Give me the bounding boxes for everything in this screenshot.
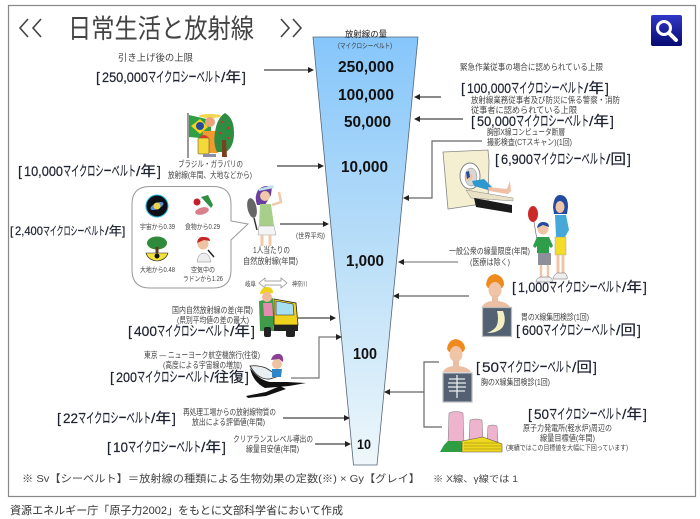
label: 250,000 dose limit: ]	[242, 69, 246, 85]
icon: man with chest X-ray	[443, 339, 472, 402]
label: 10: /年	[201, 439, 221, 455]
funnel chart: radiation dose scale: 放射線の量	[345, 29, 387, 39]
label: CT scan	[487, 127, 631, 167]
title: 日常生活と放射線	[68, 14, 254, 44]
funnel chart: radiation dose scale: 10	[357, 436, 371, 452]
label: 200: (高度による宇宙線の増加)	[163, 360, 242, 370]
label: 400: (県別平均値の差の最大)	[177, 315, 249, 325]
label: CT scan: ]	[627, 151, 631, 167]
label: 200: 200	[116, 369, 137, 385]
panel: natural radiation sources: 大地から0.48	[140, 265, 175, 274]
label: 2,400: [	[10, 224, 14, 238]
label: 200: /往復	[210, 369, 244, 385]
label: 200: ]	[245, 369, 249, 385]
label: 50,000 workers: 従事者に認められている上限	[471, 105, 577, 115]
label: 50 per year: 50	[534, 406, 549, 422]
note: sievert definition	[22, 472, 518, 485]
label: 22: マイクロシーベルト	[78, 410, 151, 426]
label: 600	[516, 312, 641, 338]
label: 50,000 workers: [	[471, 113, 475, 129]
label: 50 per scan: 50	[482, 359, 499, 375]
label: 50 per scan: マイクロシーベルト	[499, 359, 572, 375]
label: public limit: [	[512, 279, 516, 295]
label: 600: マイクロシーベルト	[543, 322, 616, 338]
label: public limit: ]	[643, 279, 647, 295]
label: 50 per year	[506, 406, 647, 452]
label: 400: 国内自然放射線の差(年間)	[172, 305, 253, 315]
label: 600: 600	[522, 322, 543, 338]
label: 200	[110, 350, 260, 385]
funnel chart: radiation dose scale: (マイクロシーベルト)	[338, 42, 392, 50]
label: 50 per year: 原子力発電所(軽水炉)周辺の	[523, 423, 612, 433]
panel: natural radiation sources: 食物から0.29	[185, 222, 220, 231]
label: 10: ]	[222, 439, 226, 455]
label: 100,000 emergency: ]	[605, 80, 609, 96]
panel: natural radiation sources: ラドンから1.26	[183, 275, 223, 283]
label: 100,000 emergency	[460, 62, 609, 96]
label: world average natural radiation	[243, 231, 325, 266]
arrow: 10	[315, 441, 351, 447]
label: 10,000 Brazil: マイクロシーベルト	[63, 163, 136, 179]
label: 2,400: マイクロシーベルト	[43, 224, 105, 238]
label: public limit: マイクロシーベルト	[549, 279, 622, 295]
panel: natural radiation sources: 宇宙から0.39	[140, 223, 175, 231]
label: 10,000 Brazil: 放射線(年間、大地などから)	[168, 170, 252, 180]
arrow: 50,000	[414, 116, 463, 122]
icon: Gifu Kanagawa comparison	[245, 278, 307, 288]
icon: CT scanner	[443, 150, 513, 213]
icon: tennis player	[246, 185, 281, 246]
label: 2,400: 2,400	[15, 224, 43, 238]
icon: mother, child and balloon	[528, 195, 569, 282]
label: 400	[128, 305, 255, 339]
label: CT scan: /回	[606, 151, 626, 167]
label: 10: クリアランスレベル導出の	[233, 434, 313, 444]
arrow: 2,400	[280, 221, 329, 227]
label: 22: ]	[172, 410, 176, 426]
funnel chart: radiation dose scale: 100,000	[338, 87, 394, 104]
label: 200: [	[110, 369, 114, 385]
label: 100,000 emergency: /年	[584, 80, 604, 96]
icon: nuclear power plant	[440, 412, 502, 452]
label: 10: [	[107, 439, 111, 455]
funnel chart: radiation dose scale: 1,000	[346, 253, 384, 270]
icon: search button	[651, 15, 682, 46]
label: 50 per year: /年	[622, 406, 642, 422]
label: 22	[57, 407, 276, 427]
arrow: 400	[298, 315, 336, 321]
label: 50 per year: 線量目標値(年間)	[540, 433, 595, 443]
label: 22: 22	[63, 410, 78, 426]
label: 50 per scan	[476, 359, 597, 387]
icon: airplane and passenger	[246, 354, 306, 398]
label: 400: マイクロシーベルト	[157, 323, 230, 339]
label: 50 per year: マイクロシーベルト	[549, 406, 622, 422]
icon: Gifu Kanagawa comparison: 神奈川	[292, 279, 307, 288]
funnel chart: radiation dose scale: 10,000	[341, 159, 388, 176]
label: 50 per scan: [	[476, 359, 480, 375]
label: 400: /年	[230, 323, 250, 339]
label: 200: 東京 — ニューヨーク航空機旅行(往復)	[144, 350, 260, 360]
label: world average natural radiation: (世界平均)	[296, 231, 325, 240]
arrow: 50 bracket	[384, 362, 442, 427]
arrow: 22	[283, 415, 350, 421]
label: 600: [	[516, 322, 520, 338]
label: public limit: 1,000	[518, 279, 549, 295]
label: 50 per year: (実績ではこの目標値を大幅に下回っています)	[506, 443, 628, 452]
arrow: 250,000	[264, 67, 314, 73]
label: 10,000 Brazil: [	[18, 163, 22, 179]
label: 250,000 dose limit: 250,000	[102, 69, 148, 85]
label: 600: /回	[616, 322, 636, 338]
label: 10: 線量目安値(年間)	[246, 444, 299, 454]
arrow: 100,000	[414, 94, 441, 100]
label: 50 per scan: /回	[572, 359, 592, 375]
label: 50,000 workers: 50,000	[477, 113, 516, 129]
label: 10	[107, 434, 313, 455]
label: 50,000 workers: マイクロシーベルト	[516, 113, 589, 129]
arrow: 1,000	[398, 259, 458, 265]
label: 10,000 Brazil: ]	[157, 163, 161, 179]
label: CT scan: 撮影検査(CTスキャン)(1回)	[487, 137, 572, 147]
label: CT scan: 6,900	[501, 151, 533, 167]
label: 250,000 dose limit: [	[96, 69, 100, 85]
note: sievert definition: ※ X線、γ線では 1	[433, 473, 518, 484]
label: 50 per scan: 胸のX線集団検診(1回)	[481, 377, 550, 387]
label: 400: ]	[251, 323, 255, 339]
icon: Gifu Kanagawa comparison: 岐阜	[245, 279, 256, 288]
arrow: CT scan	[403, 141, 482, 201]
label: 200: マイクロシーベルト	[137, 369, 210, 385]
label: public limit: /年	[622, 279, 642, 295]
label: 22: 再処理工場からの放射線物質の	[183, 407, 276, 417]
label: 50,000 workers: /年	[589, 113, 609, 129]
label: CT scan: 胸部X線コンピュータ断層	[487, 127, 565, 137]
label: 400: 400	[134, 323, 157, 339]
funnel chart: radiation dose scale: 250,000	[338, 59, 394, 76]
label: 22: /年	[151, 410, 171, 426]
label: 10,000 Brazil: 10,000	[24, 163, 63, 179]
label: public limit: 一般公衆の線量限度(年間)	[449, 246, 530, 256]
label: 2,400: /年	[105, 224, 122, 238]
label: 10,000 Brazil: /年	[136, 163, 156, 179]
label: 250,000 dose limit: マイクロシーベルト	[148, 69, 221, 85]
label: CT scan: [	[495, 151, 499, 167]
label: public limit: (医療は除く)	[470, 257, 510, 267]
arrow: 200	[291, 334, 342, 378]
label: 250,000 dose limit	[96, 52, 246, 85]
icon: Brazil Guarapari	[188, 113, 234, 158]
note: sievert definition: ※ Sv【シーベルト】＝放射線の種類による生物効果の定数(※) × Gy【グレイ】	[22, 472, 420, 485]
funnel chart: radiation dose scale: 100	[353, 346, 377, 363]
label: 10,000 Brazil	[18, 159, 252, 180]
source footer: 資源エネルギー庁「原子力2002」をもとに文部科学省において作成	[10, 503, 343, 517]
icon: man with stomach X-ray	[482, 274, 512, 336]
label: 10: 10	[113, 439, 128, 455]
label: 100,000 emergency: 緊急作業従事の場合に認められている上限	[460, 62, 603, 72]
label: public limit	[449, 246, 647, 295]
panel: natural radiation sources	[132, 186, 248, 288]
arrow: 10,000	[277, 163, 324, 169]
label: 400: [	[128, 323, 132, 339]
icon: truck and driver	[259, 287, 298, 337]
funnel chart: radiation dose scale	[313, 29, 418, 465]
label: 2,400: ]	[122, 224, 125, 238]
label: 50 per scan: ]	[593, 359, 597, 375]
label: world average natural radiation: 1人当たりの	[253, 245, 290, 255]
label: 50 per year: ]	[643, 406, 647, 422]
label: 22: [	[57, 410, 61, 426]
label: world average natural radiation: 自然放射線(年間)	[243, 256, 298, 266]
funnel chart: radiation dose scale: 50,000	[344, 114, 391, 131]
label: 10: マイクロシーベルト	[128, 439, 201, 455]
label: 600: ]	[637, 322, 641, 338]
label: 50 per year: [	[528, 406, 532, 422]
arrow: 600	[393, 293, 469, 299]
label: 22: 放出による評価値(年間)	[192, 417, 265, 427]
label: 50,000 workers	[471, 95, 620, 129]
label: 250,000 dose limit: 引き上げ後の上限	[118, 52, 193, 64]
label: 50,000 workers: 放射線業務従事者及び防災に係る警察・消防	[471, 95, 620, 105]
label: 250,000 dose limit: /年	[221, 69, 241, 85]
label: 50,000 workers: ]	[610, 113, 614, 129]
panel: natural radiation sources: 空気中の	[191, 265, 215, 274]
label: 100,000 emergency: マイクロシーベルト	[511, 80, 584, 96]
label: 100,000 emergency: [	[461, 80, 465, 96]
label: 10,000 Brazil: ブラジル・ガラパリの	[178, 159, 243, 169]
label: 100,000 emergency: 100,000	[467, 80, 511, 96]
label: CT scan: マイクロシーベルト	[533, 151, 606, 167]
label: 600: 胃のX線集団検診(1回)	[521, 312, 589, 322]
